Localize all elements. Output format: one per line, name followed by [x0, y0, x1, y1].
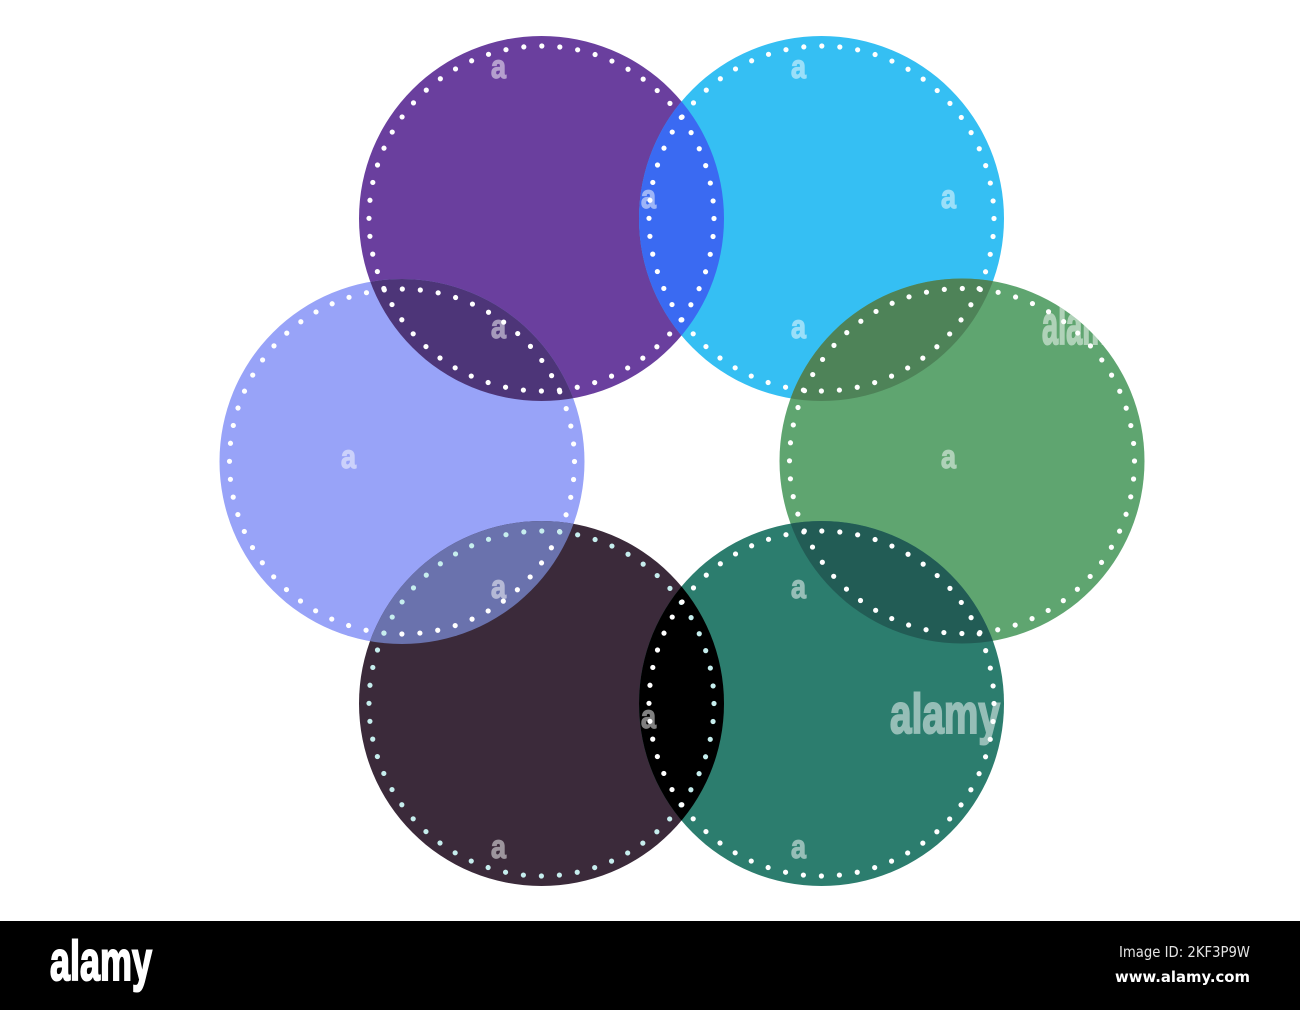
dotted ring: purple — [369, 46, 714, 391]
watermark letters: a — [641, 178, 657, 215]
overlap: green and teal — [790, 521, 993, 644]
watermark letters: a — [791, 308, 807, 345]
dotted ring: plum — [369, 531, 714, 876]
image id: Image ID: 2KF3P9W — [1119, 943, 1250, 961]
watermark letters — [341, 48, 957, 865]
watermark letters: a — [491, 568, 507, 605]
dotted ring: periwinkle — [230, 289, 574, 634]
watermark letters: a — [641, 698, 657, 735]
watermark letters: a — [941, 438, 957, 475]
circle: teal — [639, 521, 1004, 886]
circle: green — [780, 278, 1144, 644]
watermark: large alamy on teal: alamy — [890, 682, 1000, 745]
watermark letters: a — [791, 828, 807, 865]
watermark letters: a — [791, 568, 807, 605]
watermark letters: a — [491, 828, 507, 865]
footer logo: alamy — [50, 929, 152, 992]
watermark letters: a — [491, 308, 507, 345]
dotted ring: teal — [649, 531, 994, 876]
overlap: blue and green — [790, 278, 993, 401]
dotted ring: green — [790, 288, 1134, 634]
overlap: purple and blue — [639, 102, 724, 336]
watermark letters: a — [941, 178, 957, 215]
website: www.alamy.com — [1115, 968, 1250, 986]
overlap: plum and teal — [639, 586, 724, 820]
circle: periwinkle — [220, 279, 584, 644]
overlap: periwinkle and plum — [370, 521, 574, 644]
circle: sky blue — [639, 36, 1004, 401]
circle: purple — [359, 36, 724, 401]
watermark letters: a — [791, 48, 807, 85]
overlap: purple and periwinkle — [370, 279, 574, 401]
dotted ring: blue — [649, 46, 994, 391]
watermark: partial ala on green: alam — [1042, 293, 1108, 356]
panel: circle group — [220, 36, 1144, 886]
footer bar — [0, 921, 1300, 1010]
watermark letters: a — [491, 48, 507, 85]
circle: dark plum — [359, 521, 724, 886]
watermark letters: a — [341, 438, 357, 475]
